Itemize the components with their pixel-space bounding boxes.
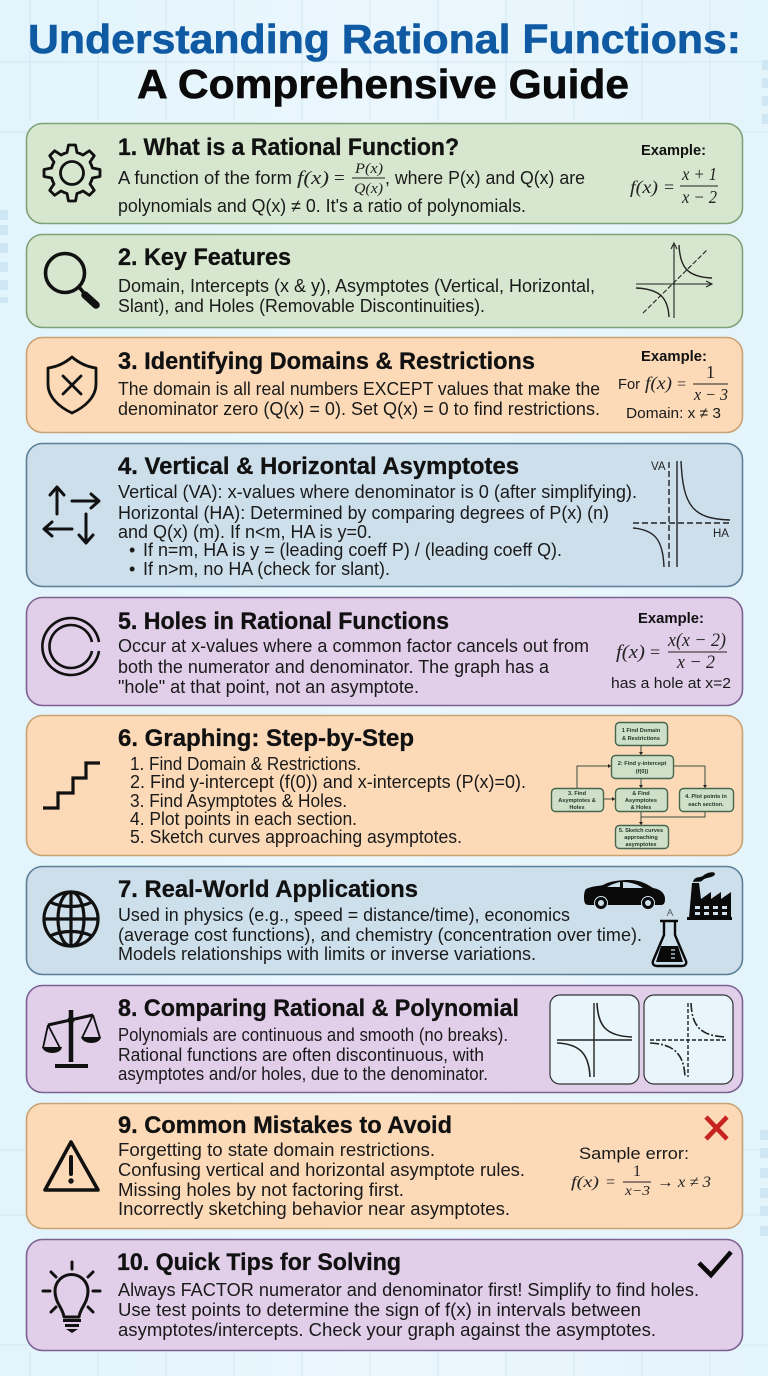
icon: four arrows (44, 487, 99, 543)
chart: flowchart: asymptotes (625, 842, 657, 848)
icon: stairs (43, 763, 100, 808)
heading: 9. Common Mistakes to Avoid (118, 1112, 452, 1139)
body text: denominator zero (Q(x) = 0). Set Q(x) = 0 to find restrictions. (118, 399, 600, 419)
numbered steps: 1. Find Domain & Restrictions. (130, 754, 361, 774)
body text: Use test points to determine the sign of f(x) in intervals between (118, 1300, 641, 1320)
heading: 3. Identifying Domains & Restrictions (118, 348, 535, 375)
panel: 6 graphing steps (26, 716, 742, 856)
body text: (average cost functions), and chemistry (concentration over time). (118, 925, 642, 945)
body text: Rational functions are often discontinuous, with (118, 1045, 484, 1065)
body text: Horizontal (HA): Determined by comparing degrees of P(x) (n) (118, 503, 609, 523)
body text (118, 1140, 525, 1219)
chart: flowchart: Asymptotes & (558, 798, 596, 804)
icon: globe (44, 892, 98, 946)
icon: concentric open circles (42, 618, 99, 675)
example: Example: (641, 142, 706, 159)
panel: 7 real-world applications (26, 866, 742, 974)
numbered steps: 3. Find Asymptotes & Holes. (130, 791, 347, 811)
body text: Incorrectly sketching behavior near asymptotes. (118, 1199, 510, 1219)
body text: f(x) (297, 168, 329, 189)
example (618, 348, 728, 422)
icon: light bulb (43, 1262, 100, 1333)
body text: Occur at x-values where a common factor cancels out from (118, 636, 589, 656)
panel: 4 asymptotes (26, 444, 742, 586)
icon: warning triangle (45, 1142, 98, 1190)
chart: flowchart: approaching (624, 835, 658, 841)
panel: 3 domains (26, 338, 742, 432)
example: Example: (638, 610, 704, 627)
body text: Domain, Intercepts (x & y), Asymptotes (Vertical, Horizontal, (118, 276, 595, 296)
heading: 5. Holes in Rational Functions (118, 608, 449, 635)
heading: 2. Key Features (118, 244, 291, 271)
panel: 8 comparing (26, 986, 742, 1092)
body text: • (129, 559, 135, 579)
chart: VA and HA graph: VA (651, 461, 666, 473)
icon: car (584, 880, 665, 910)
heading: 8. Comparing Rational & Polynomial (118, 995, 519, 1022)
numbered steps: 4. Plot points in each section. (130, 809, 357, 829)
sample error: = (606, 1174, 615, 1191)
body text: Models relationships with limits or inverse variations. (118, 944, 536, 964)
chart: flowchart: each section. (688, 802, 724, 808)
example: x − 3 (693, 385, 728, 404)
example: has a hole at x=2 (611, 675, 731, 692)
icon: check mark (699, 1252, 731, 1275)
heading: 7. Real-World Applications (118, 876, 418, 903)
chart: flowchart: & Find (632, 791, 650, 797)
body text (118, 1025, 508, 1084)
body text (118, 636, 589, 697)
body text: If n>m, no HA (check for slant). (143, 559, 390, 579)
icon: magnifying glass (46, 254, 96, 305)
title: Understanding Rational Functions: (28, 16, 741, 62)
body text: If n=m, HA is y = (leading coeff P) / (leading coeff Q). (143, 540, 562, 560)
panel: 9 common mistakes (26, 1104, 742, 1228)
body text: both the numerator and denominator. The graph has a (118, 657, 550, 677)
example: f(x) (616, 642, 645, 663)
chart: solid asymptote graph (550, 995, 639, 1084)
chart: rational function graph (636, 243, 712, 318)
body text: asymptotes and/or holes, due to the denominator. (118, 1064, 488, 1084)
icon: factory (687, 872, 732, 920)
chart: flowchart (552, 722, 734, 848)
body text: Forgetting to state domain restrictions. (118, 1140, 435, 1160)
sample error: x−3 (624, 1184, 650, 1199)
icon: balance scale (42, 1010, 101, 1068)
example: = (677, 376, 686, 393)
sample error: 1 (633, 1163, 641, 1180)
sample error: → x ≠ 3 (657, 1174, 711, 1191)
chart: flowchart: & Holes (631, 805, 651, 811)
panel: 2 key features (26, 234, 742, 328)
example (611, 610, 731, 692)
body text: A function of the form (118, 168, 292, 188)
panel: 10 quick tips (26, 1240, 742, 1350)
example: Example: (641, 348, 707, 365)
body text: Confusing vertical and horizontal asymptote rules. (118, 1160, 525, 1180)
chart: VA and HA graph: HA (713, 528, 729, 540)
chart: flowchart: 2: Find y-intercept (618, 761, 666, 767)
example: = (664, 177, 674, 197)
body text: Polynomials are continuous and smooth (no breaks). (118, 1025, 508, 1045)
numbered steps: 2. Find y-intercept (f(0)) and x-intercepts (P(x)=0). (130, 772, 526, 792)
icon: red x (706, 1117, 727, 1139)
body text: Q(x) (354, 181, 383, 197)
panel: 5 holes (26, 598, 742, 706)
body text (118, 276, 595, 316)
chart: flowchart: Asymptotes (625, 798, 657, 804)
chart: flowchart: Holes (569, 805, 585, 811)
body text: The domain is all real numbers EXCEPT values that make the (118, 379, 600, 399)
body text: P(x) (354, 161, 383, 177)
numbered steps (130, 754, 526, 847)
example: 1 (706, 362, 715, 382)
heading: 1. What is a Rational Function? (118, 134, 459, 161)
body text: Slant), and Holes (Removable Discontinuities). (118, 296, 485, 316)
body text: "hole" at that point, not an asymptote. (118, 677, 419, 697)
chart: VA and HA graph (633, 461, 730, 567)
chart: dashed asymptote graph (644, 995, 733, 1084)
example: f(x) (645, 373, 672, 394)
body text: , where P(x) and Q(x) are (385, 168, 585, 188)
example: x − 2 (676, 652, 715, 673)
body text: = (334, 168, 345, 189)
body text: asymptotes/intercepts. Check your graph against the asymptotes. (118, 1320, 656, 1340)
example: x + 1 (681, 164, 717, 184)
body text: • (129, 540, 135, 560)
example: f(x) (630, 177, 658, 198)
title: A Comprehensive Guide (137, 61, 629, 107)
example: x(x − 2) (667, 630, 726, 651)
example (630, 142, 718, 207)
body text: Vertical (VA): x-values where denominator is 0 (after simplifying). (118, 482, 637, 502)
chart: flowchart: 5. Sketch curves (619, 828, 663, 834)
body text (118, 905, 642, 964)
example: = (650, 642, 660, 662)
sample error: Sample error: (579, 1144, 689, 1163)
example: x − 2 (681, 187, 717, 207)
body text (118, 1280, 699, 1340)
body text: Missing holes by not factoring first. (118, 1180, 404, 1200)
body text (118, 379, 600, 419)
chart: flowchart: & Restrictions (622, 736, 660, 742)
example: Domain: x ≠ 3 (626, 405, 721, 422)
panel: 1 what is a rational function (26, 124, 742, 224)
heading: 6. Graphing: Step-by-Step (118, 725, 414, 752)
icon: gear (44, 145, 100, 201)
numbered steps: 5. Sketch curves approaching asymptotes. (130, 827, 462, 847)
icon: shield with x (48, 357, 96, 413)
body text: Used in physics (e.g., speed = distance/time), economics (118, 905, 570, 925)
chart: flowchart: 3. Find (568, 791, 587, 797)
chart: flowchart: 1 Find Domain (622, 728, 661, 734)
example: For (618, 376, 640, 393)
heading: 4. Vertical & Horizontal Asymptotes (118, 453, 519, 480)
title (28, 16, 741, 107)
sample error (571, 1144, 711, 1199)
body text: polynomials and Q(x) ≠ 0. It's a ratio of polynomials. (118, 196, 526, 216)
chart: flowchart: (f(0)) (636, 769, 648, 775)
body text: and Q(x) (m). If n<m, HA is y=0. (118, 522, 372, 542)
body text (118, 482, 637, 579)
icon: flask (653, 909, 686, 966)
body text (118, 161, 585, 216)
sample error: f(x) (571, 1174, 599, 1191)
body text: Always FACTOR numerator and denominator first! Simplify to find holes. (118, 1280, 699, 1300)
chart: flowchart: 4. Plot points in (685, 794, 727, 800)
heading: 10. Quick Tips for Solving (117, 1249, 401, 1276)
